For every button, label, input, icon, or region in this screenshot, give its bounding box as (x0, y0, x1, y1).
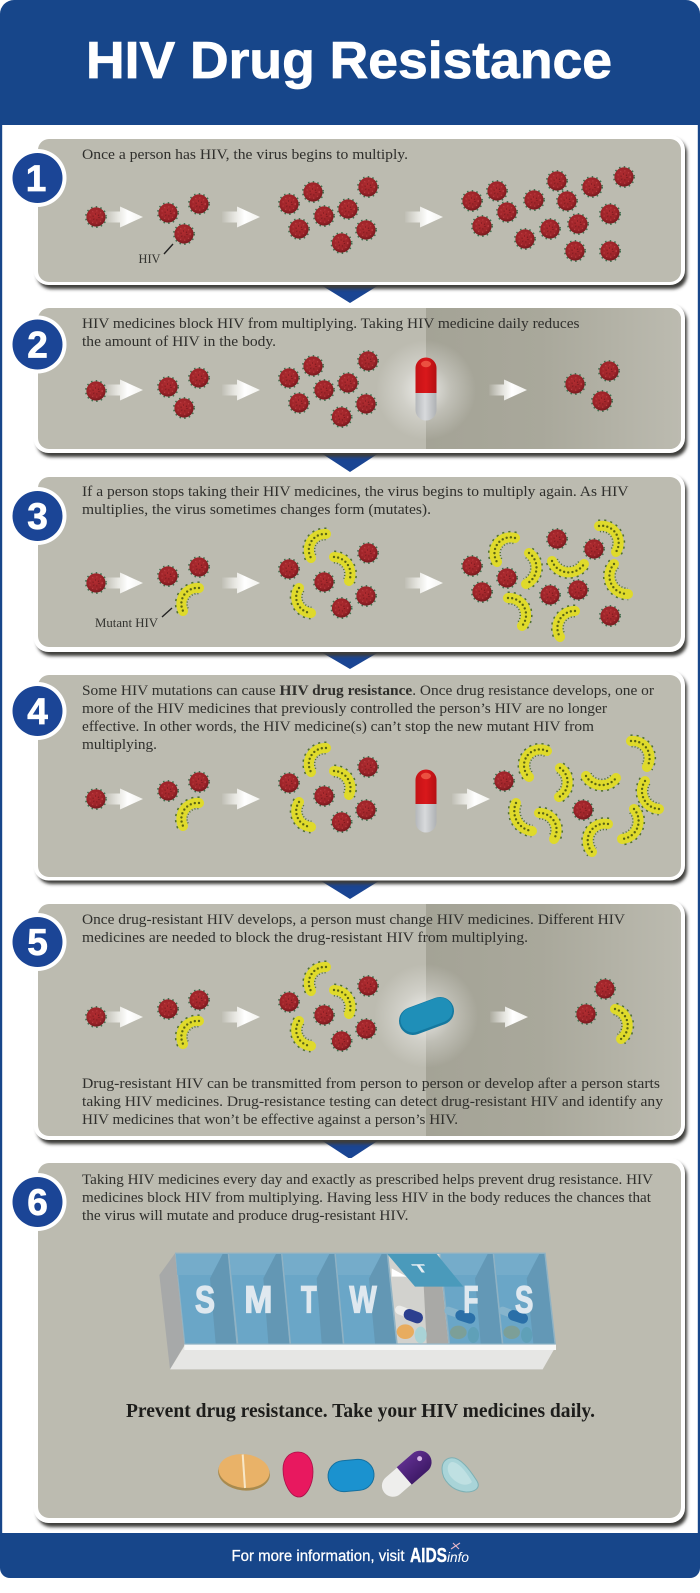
step 2 text: the amount of HIV in the body. (82, 334, 276, 350)
panel 5 (8, 900, 687, 1144)
flow arrow 4 to 5 (321, 881, 379, 899)
panel 6 (8, 1158, 687, 1527)
step 4 badge: 4 (27, 691, 48, 732)
weekly pill box (159, 1253, 556, 1369)
step 6 text (82, 1172, 653, 1224)
step 4 text: Some HIV mutations can cause HIV drug resistance . Once drug resistance develops, one or (82, 683, 654, 699)
header banner (0, 0, 700, 125)
step 6 badge (8, 1173, 66, 1231)
call to action: Prevent drug resistance. Take your HIV medicines daily. (126, 1401, 595, 1422)
drug resistance testing text: Drug-resistant HIV can be transmitted from person to person or develop after a person starts (82, 1076, 660, 1092)
HIV label (138, 244, 173, 266)
flow arrow 5 to 6 (321, 1140, 379, 1159)
panel 2 (8, 303, 687, 457)
footer (0, 1533, 700, 1578)
step 2 text: HIV medicines block HIV from multiplying. Taking HIV medicine daily reduces (82, 316, 580, 332)
step 4 text: more of the HIV medicines that previously controlled the person’s HIV are no longer (82, 701, 607, 717)
step 3 text: multiplies, the virus sometimes changes form (mutates). (82, 502, 431, 518)
step 1 badge (8, 149, 66, 207)
drug resistant virus diagram (86, 741, 659, 852)
step 5 text (82, 912, 625, 946)
weekly pill box: W (349, 1280, 377, 1322)
step 5 badge (8, 913, 66, 971)
weekly pill box: F (463, 1280, 478, 1322)
step 4 text: multiplying. (82, 737, 157, 753)
icon: blue pill (413, 1010, 440, 1021)
virus reduction diagram (86, 351, 619, 427)
virus mutation diagram (86, 526, 628, 637)
weekly pill box: M (244, 1280, 272, 1322)
AIDSinfo logo: info (447, 1550, 469, 1565)
drug resistance testing text: HIV medicines that won’t be effective against a person’s HIV. (82, 1112, 458, 1128)
footer text: For more information, visit (232, 1548, 405, 1565)
panel 4 (8, 670, 687, 884)
step 4 badge (8, 682, 66, 740)
Mutant HIV label: Mutant HIV (95, 616, 158, 630)
icon: pale teal pill (442, 1458, 478, 1492)
HIV label: HIV (138, 252, 160, 266)
step 1 text: Once a person has HIV, the virus begins to multiply. (82, 147, 408, 163)
step 4 text (82, 683, 654, 753)
step 2 badge (8, 316, 66, 374)
step 1 badge: 1 (26, 158, 46, 199)
weekly pill box: S (195, 1280, 215, 1322)
Mutant HIV label (95, 608, 172, 630)
step 6 text: medicines block HIV from multiplying. Having less HIV in the body reduces the chances that (82, 1190, 651, 1206)
flow arrow 2 to 3 (321, 453, 379, 472)
step 3 badge: 3 (27, 496, 48, 537)
step 3 badge (8, 487, 66, 545)
icon: red and grey capsule (416, 770, 436, 832)
step 5 text: medicines are needed to block the drug-resistant HIV from multiplying. (82, 930, 528, 946)
step 3 text (82, 484, 629, 518)
step 6 text: the virus will mutate and produce drug-resistant HIV. (82, 1208, 408, 1224)
AIDSinfo logo: AIDS (410, 1544, 447, 1567)
weekly pill box: S (515, 1280, 533, 1322)
weekly pill box: T (409, 1261, 433, 1275)
virus multiplication diagram (86, 167, 634, 261)
icon: blue oval pill (327, 1458, 375, 1493)
panel 3 (8, 473, 687, 656)
step 2 text (82, 316, 580, 350)
step 3 text: If a person stops taking their HIV medicines, the virus begins to multiply again. As HIV (82, 484, 629, 500)
drug resistance testing text (82, 1076, 664, 1128)
step 6 text: Taking HIV medicines every day and exactly as prescribed helps prevent drug resistance. HIV (82, 1172, 653, 1188)
step 5 text: Once drug-resistant HIV develops, a person must change HIV medicines. Different HIV (82, 912, 625, 928)
step 2 badge: 2 (27, 324, 48, 366)
new medicine virus diagram (86, 967, 628, 1051)
icon: red and grey capsule (416, 358, 436, 420)
step 5 badge: 5 (27, 922, 48, 963)
title: HIV Drug Resistance (86, 32, 612, 90)
step 4 text: effective. In other words, the HIV medicine(s) can’t stop the new mutant HIV from (82, 719, 595, 735)
weekly pill box: T (301, 1280, 317, 1322)
flow arrow 1 to 2 (321, 285, 379, 303)
flow arrow 3 to 4 (321, 652, 379, 669)
icon: orange tablet (216, 1452, 272, 1493)
icon: pink pill (283, 1452, 313, 1497)
panel 1 (8, 135, 687, 289)
step 6 badge: 6 (27, 1182, 48, 1223)
drug resistance testing text: taking HIV medicines. Drug-resistance testing can detect drug-resistant HIV and identify any (82, 1094, 664, 1110)
icon: purple and white capsule (377, 1446, 436, 1502)
